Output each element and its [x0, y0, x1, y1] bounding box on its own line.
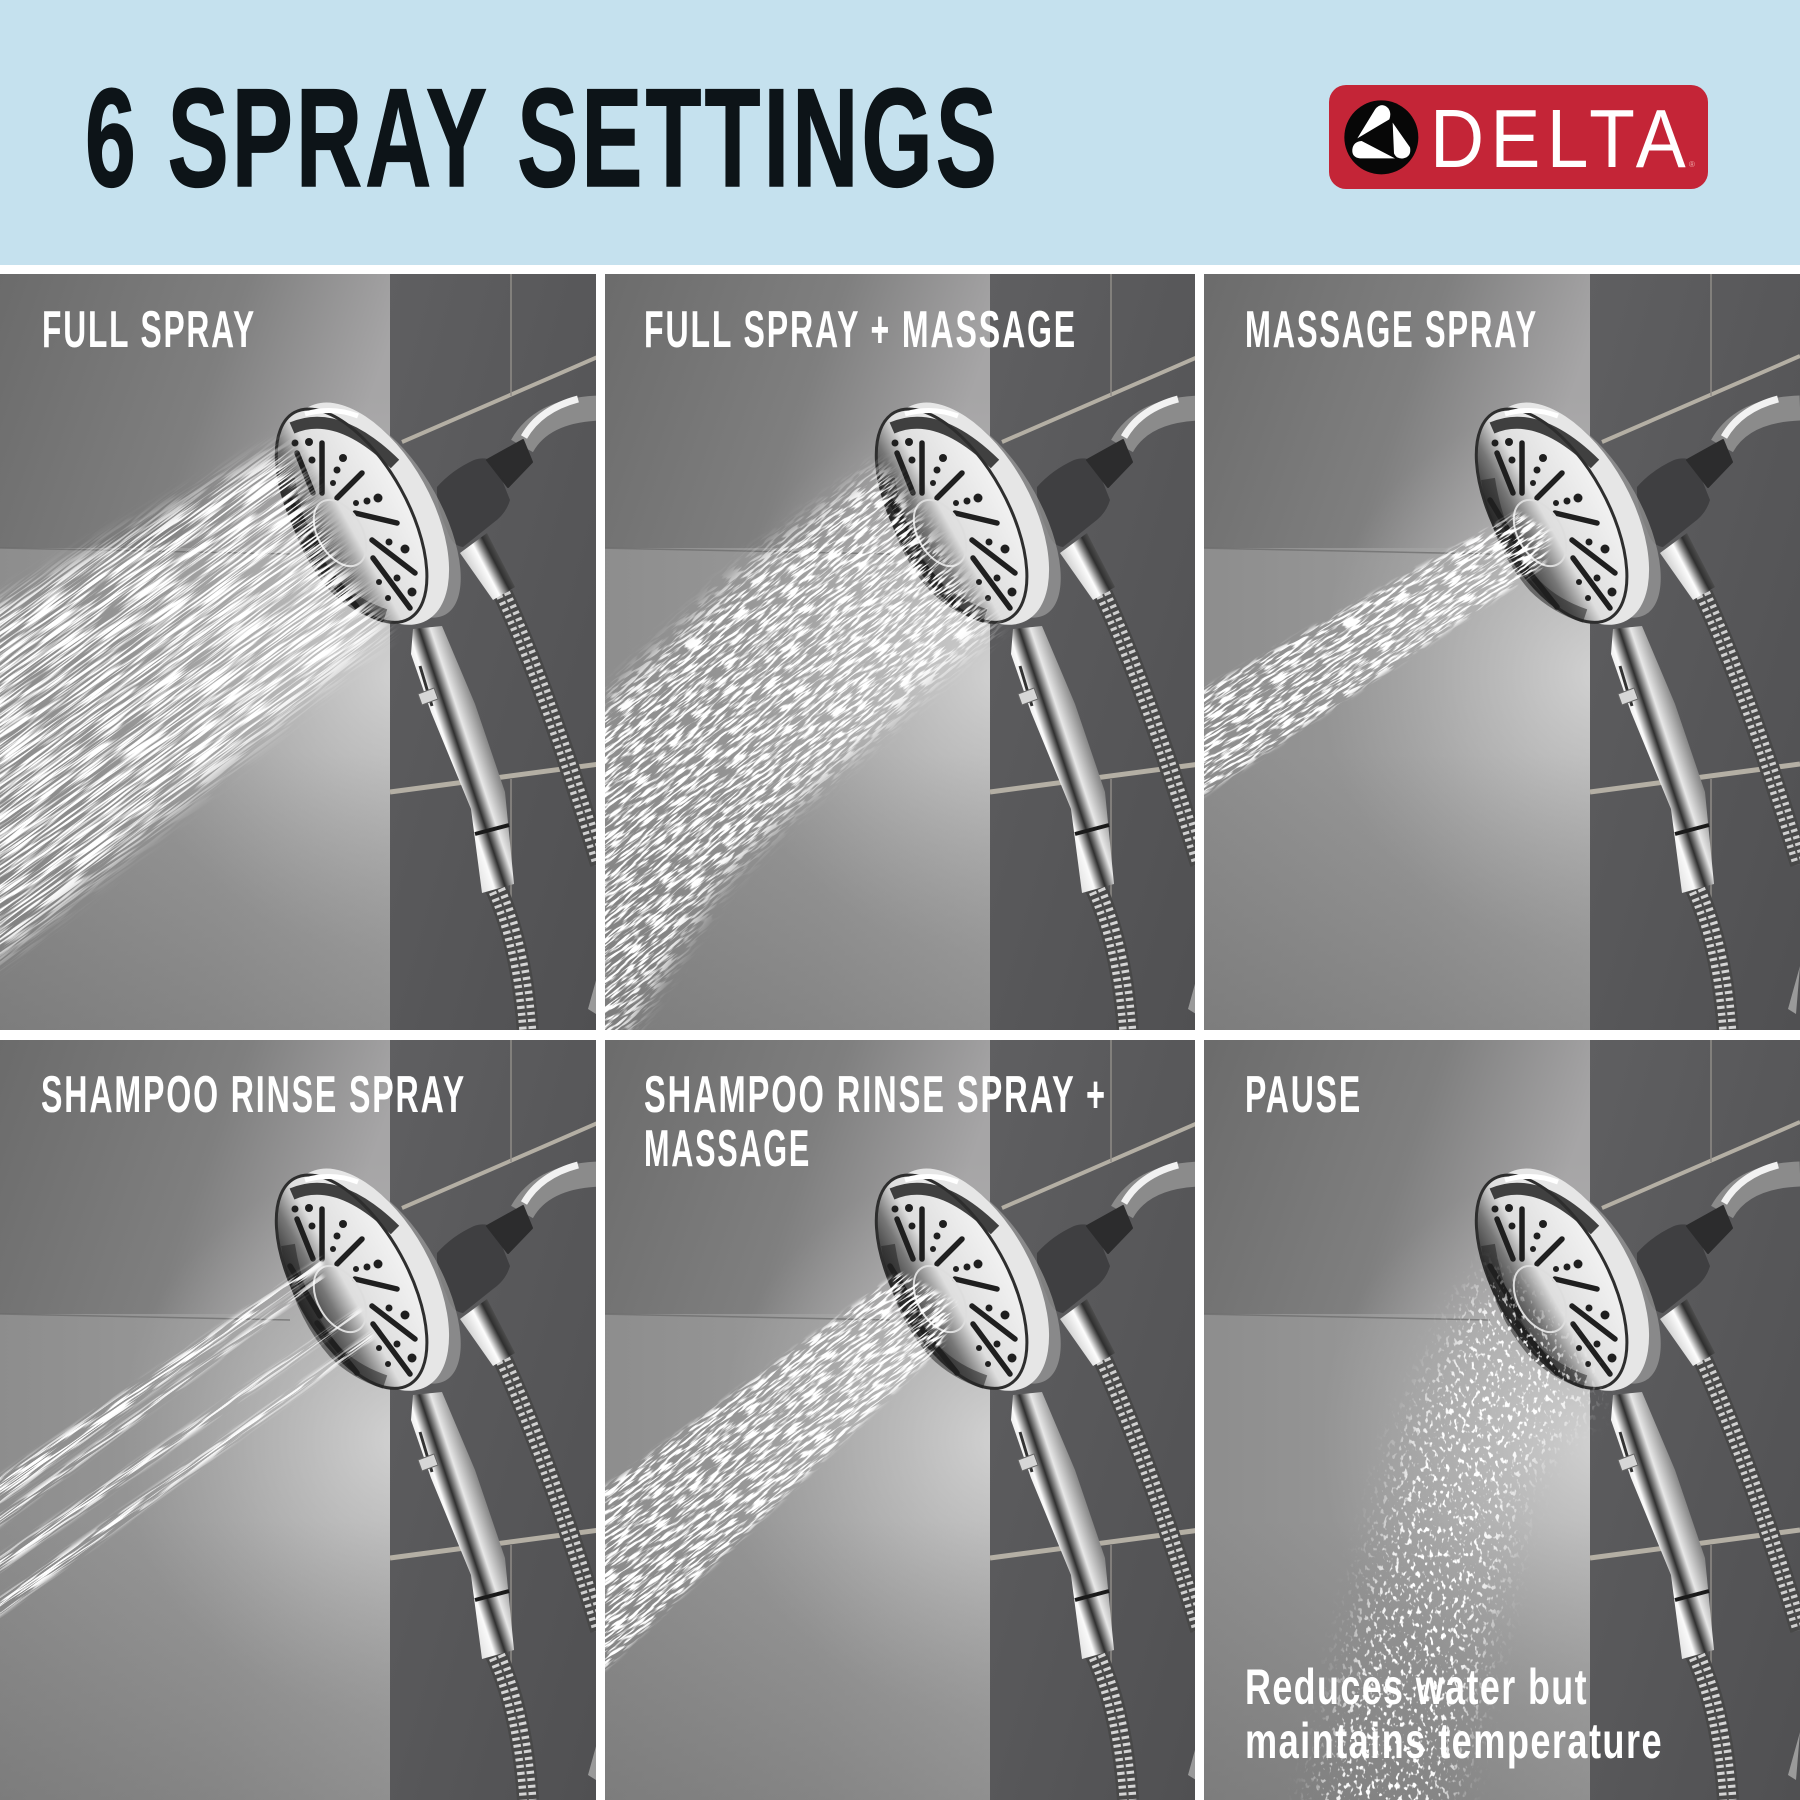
label: massage spray: MASSAGE SPRAY	[1245, 301, 1538, 359]
spray: shampoo plus massage	[605, 1271, 956, 1672]
label: pause: PAUSE	[1245, 1066, 1362, 1124]
panel: pause	[1200, 1040, 1800, 1800]
logo wordmark: DELTA	[1430, 92, 1692, 185]
panel: shampoo rinse spray	[0, 1040, 600, 1800]
text: pause description	[1245, 1659, 1663, 1769]
icon: delta triangle mark	[1344, 100, 1418, 174]
spray: pause trickle	[1296, 1259, 1609, 1800]
spray: full	[0, 436, 394, 971]
label: full spray: FULL SPRAY	[42, 301, 256, 359]
label: shampoo rinse spray + massage	[645, 1076, 1104, 1166]
header band	[0, 0, 1800, 265]
spray: full plus massage	[605, 458, 1006, 1030]
spray: shampoo rinse beams	[0, 1256, 374, 1618]
label: shampoo rinse spray + massage: MASSAGE	[644, 1120, 811, 1178]
registered mark: ®	[1689, 160, 1695, 169]
label: full spray + massage: FULL SPRAY + MASSAGE	[644, 301, 1077, 359]
panel: massage spray	[1204, 274, 1800, 1030]
panel: full spray	[0, 274, 600, 1094]
spray: massage	[1204, 510, 1552, 798]
label: shampoo rinse spray: SHAMPOO RINSE SPRAY	[41, 1066, 466, 1124]
panel: shampoo rinse spray + massage	[605, 1040, 1195, 1800]
panel: full spray + massage	[605, 274, 1195, 1030]
title: 6 SPRAY SETTINGS	[85, 59, 1000, 216]
text: pause description: Reduces water but	[1245, 1659, 1588, 1715]
logo: Delta	[1329, 85, 1708, 189]
label: shampoo rinse spray + massage: SHAMPOO RINSE SPRAY +	[644, 1066, 1107, 1124]
